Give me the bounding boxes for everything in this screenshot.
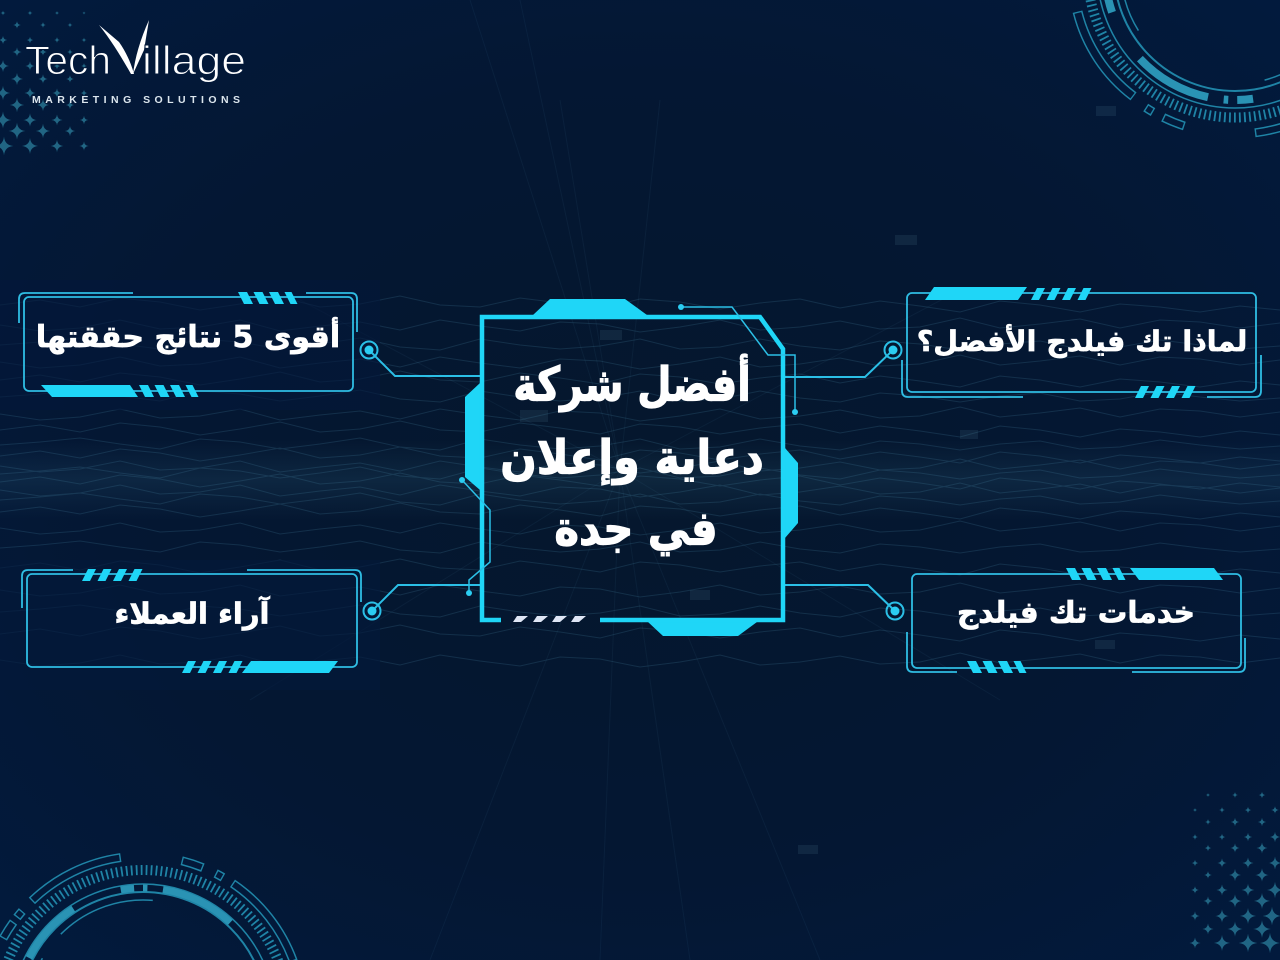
panel frame: bottom-left bbox=[22, 569, 361, 673]
decoration: top-left star field bbox=[0, 10, 89, 155]
connector: bottom-left bbox=[364, 585, 480, 620]
connector: bottom-right bbox=[785, 585, 904, 620]
heading: main title: أفضل شركة bbox=[513, 358, 751, 412]
text: bottom-left panel label: آراء العملاء bbox=[115, 596, 269, 630]
connector: top-right bbox=[785, 342, 902, 377]
logo: Tech bbox=[25, 39, 111, 83]
logo bbox=[25, 20, 246, 106]
text: top-left panel label: أقوى 5 نتائج حققتها bbox=[36, 320, 340, 355]
decoration: bottom-right star field bbox=[1189, 792, 1280, 953]
logo: illage bbox=[142, 39, 246, 83]
panel: central frame bbox=[459, 299, 798, 636]
panel frame: top-left bbox=[19, 292, 357, 397]
heading: main title bbox=[500, 353, 764, 556]
panel frame: top-right bbox=[902, 287, 1261, 398]
heading: main title: دعاية وإعلان bbox=[500, 430, 764, 486]
text: top-right panel label: لماذا تك فيلدج الأفضل؟ bbox=[917, 325, 1247, 358]
logo: MARKETING SOLUTIONS bbox=[32, 94, 244, 106]
heading: main title: في جدة bbox=[554, 502, 718, 556]
panel frame: bottom-right bbox=[907, 568, 1245, 673]
text: bottom-right panel label: خدمات تك فيلدج bbox=[957, 595, 1195, 629]
decoration: top-right HUD ring bbox=[1072, 0, 1280, 138]
connector: top-left bbox=[360, 342, 480, 376]
decoration: bottom-left HUD ring bbox=[0, 853, 298, 960]
